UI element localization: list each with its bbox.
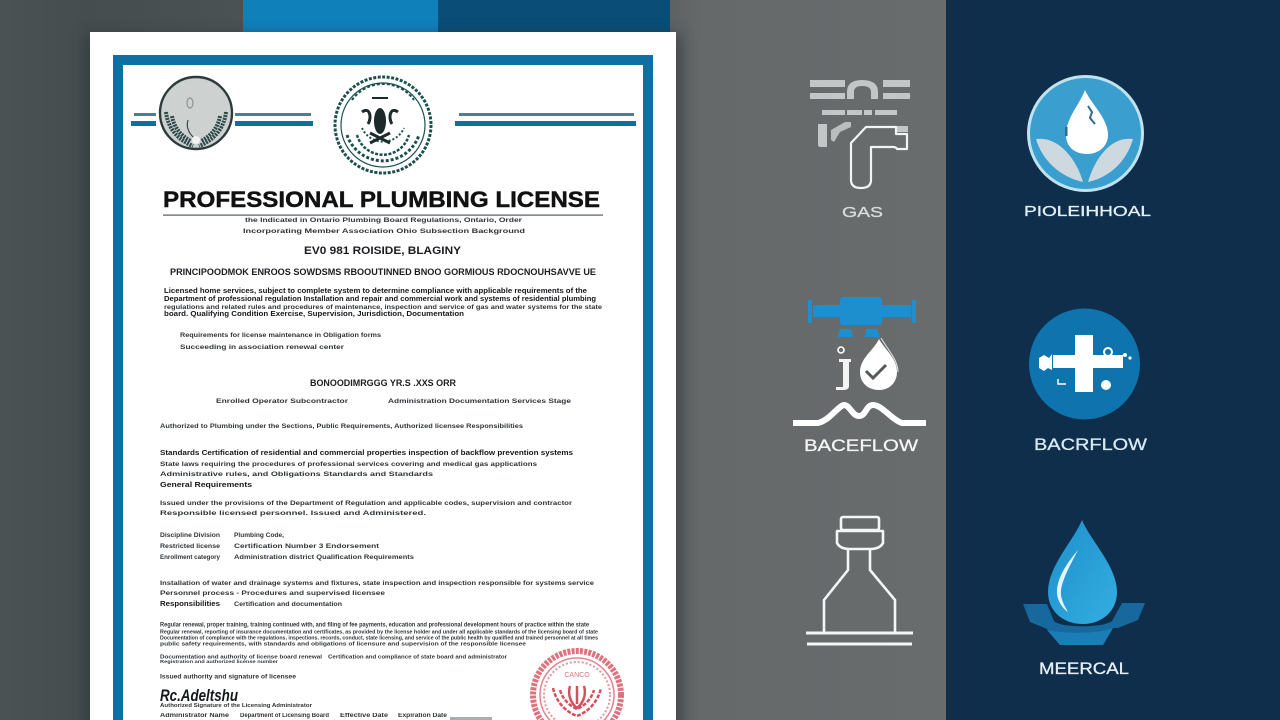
- label: backflow navy: BACRFLOW: [1034, 435, 1147, 454]
- body text: details: General Requirements: [160, 482, 252, 489]
- signature block text: Department of Licensing Board: [240, 713, 329, 719]
- signature block text: [160, 703, 448, 719]
- body text: first paragraph: Department of professional regulation Installation and repair and commercial work and systems of residential plumbing: [164, 296, 596, 303]
- body text: details: Regular renewal, proper training, training continued with, and filing of fee payments, education and professional development hours of practice within the state: [160, 622, 589, 628]
- icon group: gas: [810, 80, 910, 221]
- seal: green crest: [335, 77, 431, 173]
- body text: details: [160, 398, 598, 680]
- body text: details: Administrative rules, and Obligations Standards and Standards: [160, 471, 434, 478]
- body text: details: Regular renewal, reporting of insurance documentation and certificates, as provided by the license holder and under all applicable standards of the licensing board of state: [160, 630, 598, 636]
- icon: bottle outline: [806, 517, 913, 644]
- body text: details: Restricted license: [160, 543, 220, 550]
- body text: details: Enrolled Operator Subcontractor: [216, 398, 349, 405]
- body text: details: Enrollment category: [160, 554, 220, 561]
- body text: details: Certification and documentation: [234, 601, 342, 608]
- subtitle text: Incorporating Member Association Ohio Subsection Background: [243, 228, 525, 235]
- subtitle text: [170, 217, 596, 277]
- body text: details: Issued authority and signature of licensee: [160, 674, 297, 680]
- signature block text: Authorized Signature of the Licensing Administrator: [160, 703, 313, 709]
- signature block text: Effective Date: [340, 713, 389, 719]
- top strip: bright blue: [243, 0, 438, 34]
- icon: gas pipe: [810, 80, 910, 188]
- subtitle text: the Indicated in Ontario Plumbing Board Regulations, Ontario, Order: [245, 217, 523, 224]
- paper shadow: [84, 34, 682, 720]
- certificate paper: [90, 32, 676, 720]
- body text: first paragraph: regulations and related rules and procedures of maintenance, inspection and service of gas and water systems for the state: [164, 304, 602, 311]
- body text: first paragraph: Requirements for license maintenance in Obligation forms: [180, 332, 381, 339]
- header rules: [131, 113, 636, 126]
- icon: blue circle with cross: [1029, 308, 1140, 420]
- body text: details: Plumbing Code,: [234, 532, 284, 539]
- body text: details: Responsible licensed personnel. Issued and Administered.: [160, 510, 426, 517]
- body text: details: Documentation of compliance with the regulations, inspections, records, conduct, state licensing, and service of the public health by qualified and trained personnel at all times: [160, 636, 598, 642]
- certificate blue frame: [113, 55, 653, 720]
- panel: license certificate: [90, 32, 676, 720]
- body text: details: Standards Certification of residential and commercial properties inspection of backflow prevention systems: [160, 450, 573, 457]
- icon group: professional: [1024, 76, 1151, 220]
- body text: details: Registration and authorized license number: [160, 659, 278, 664]
- signature block text: Administrator Name: [160, 713, 230, 719]
- label: professional: PIOLEIHHOAL: [1024, 203, 1151, 220]
- body text: first paragraph: board. Qualifying Condition Exercise, Supervision, Jurisdiction, Documentation: [164, 311, 464, 318]
- body text: details: Personnel process - Procedures and supervised licensee: [160, 590, 385, 597]
- icon: backflow valve and drop: [793, 297, 926, 423]
- body text: first paragraph: Licensed home services, subject to complete system to determine compliance with applicable requirements of the: [164, 288, 587, 295]
- section heading text: BONOODIMRGGG YR.S .XXS ORR: [310, 378, 456, 389]
- body text: details: Issued under the provisions of the Department of Regulation and applicable codes, supervision and contractor: [160, 500, 573, 507]
- label: gas: GAS: [842, 204, 883, 221]
- body text: details: Certification and compliance of state board and administrator: [328, 654, 508, 660]
- title rule: [163, 214, 603, 216]
- body text: details: State laws requiring the procedures of professional services covering and medical gas applications: [160, 461, 537, 468]
- label: medical: MEERCAL: [1039, 659, 1129, 678]
- signature block text: Expiration Date: [398, 713, 448, 719]
- signature: Rc.Adeltshu: [160, 686, 238, 705]
- background: grey panel: [0, 0, 946, 720]
- body text: details: public safety requirements, with standards and obligations of licensure and supervision of the responsible licensee: [160, 642, 526, 648]
- icon: water drop in hands: [1023, 520, 1145, 645]
- heading: PROFESSIONAL PLUMBING LICENSE: [163, 187, 600, 212]
- subtitle text: PRINCIPOODMOK ENROOS SOWDSMS RBOOUTINNED BNOO GORMIOUS RDOCNOUHSAVVE UE: [170, 267, 596, 277]
- body text: details: Authorized to Plumbing under the Sections, Public Requirements, Authorized licensee Responsibilities: [160, 423, 523, 430]
- body text: details: Certification Number 3 Endorsement: [234, 543, 380, 550]
- date box: [450, 717, 492, 720]
- body text: details: Documentation and authority of license board renewal: [160, 654, 323, 660]
- body text: details: Responsibilities: [160, 601, 220, 608]
- label: backflow grey: BACEFLOW: [804, 436, 918, 455]
- body text: details: Installation of water and drainage systems and fixtures, state inspection and inspection responsible for systems service: [160, 580, 594, 587]
- background: navy panel: [946, 0, 1280, 720]
- top strip: dark blue: [438, 0, 670, 34]
- icon group: bottle: [806, 517, 913, 644]
- seal: red stamp: [533, 651, 621, 720]
- icon group: medical: [1023, 520, 1145, 678]
- body text: details: Administration district Qualification Requirements: [234, 554, 414, 561]
- seal: red stamp: CANCO: [564, 672, 590, 679]
- body text: first paragraph: Succeeding in association renewal center: [180, 344, 345, 351]
- subtitle text: EV0 981 ROISIDE, BLAGINY: [304, 245, 462, 257]
- icon: water drop and leaves badge: [1028, 76, 1142, 190]
- seal: grey emblem: [160, 77, 232, 149]
- icon group: backflow grey: [793, 297, 926, 455]
- icon group: backflow navy: [1029, 308, 1147, 454]
- body text: details: Administration Documentation Services Stage: [388, 398, 571, 405]
- body text: details: Discipline Division: [160, 532, 220, 539]
- body text: first paragraph: [164, 288, 602, 351]
